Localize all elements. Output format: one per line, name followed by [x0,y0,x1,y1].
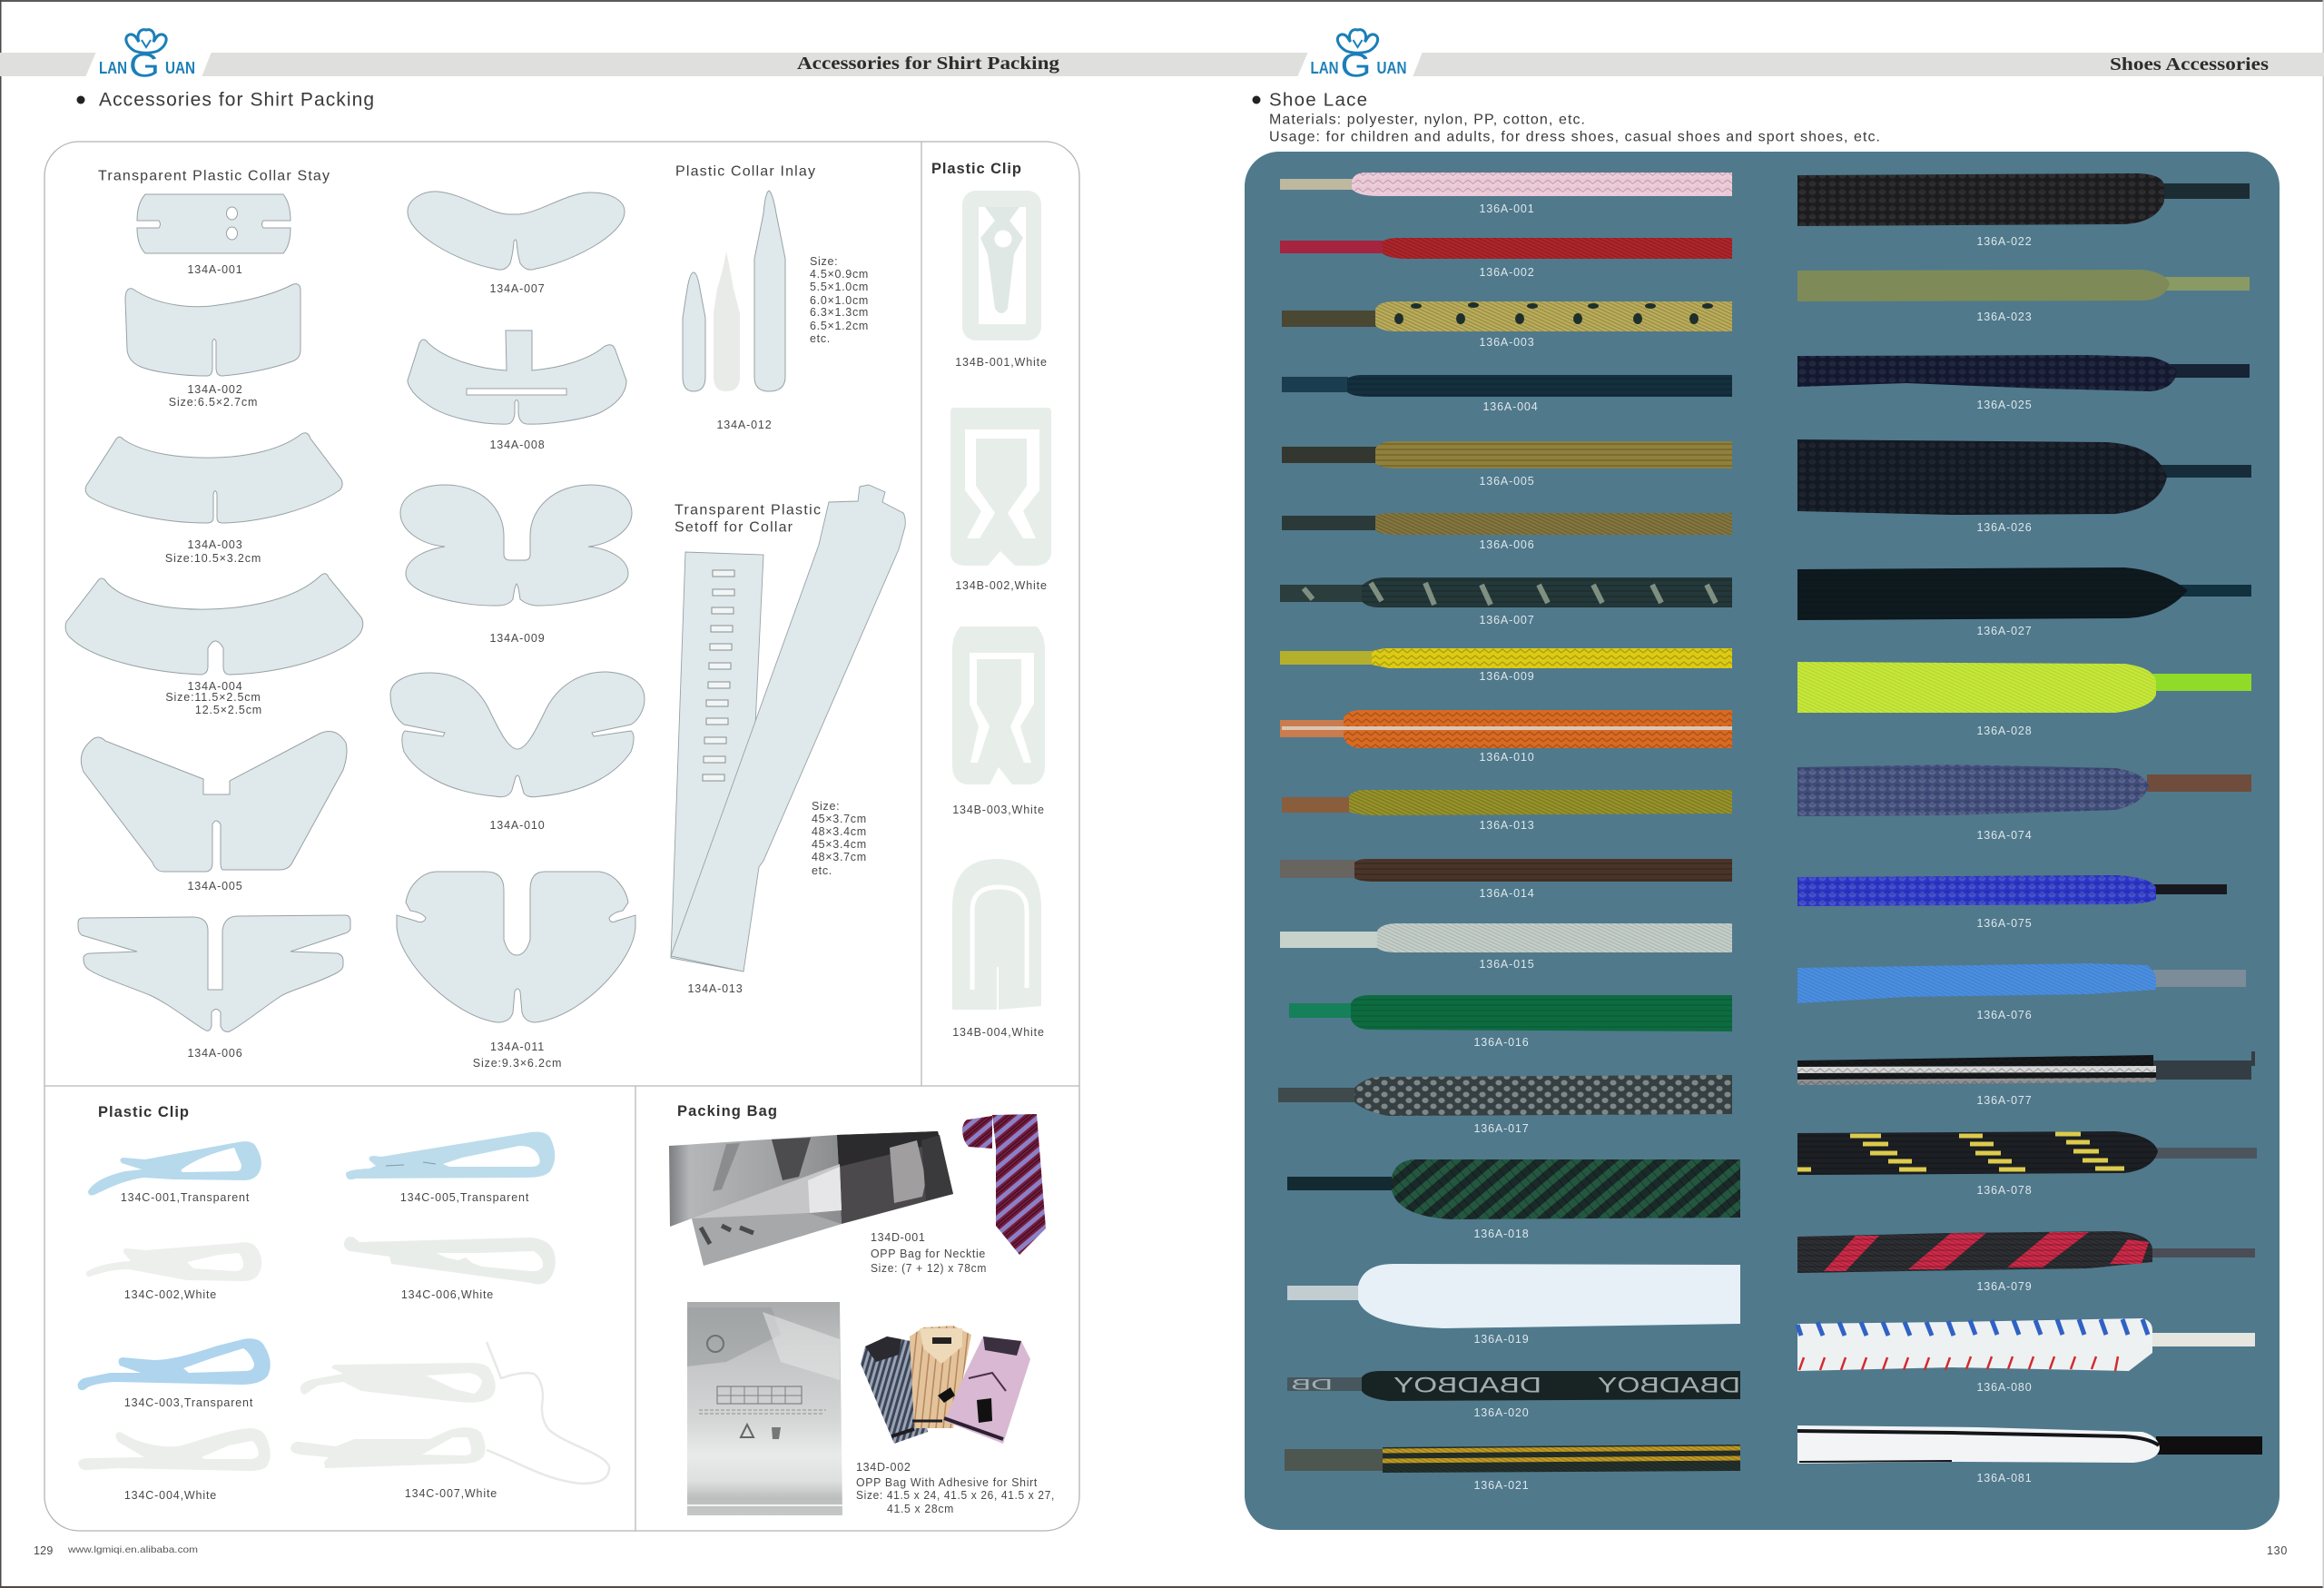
size list: inlay: 4.5×0.9cm [810,268,869,281]
collar stay 134A-007 [408,192,625,270]
label: 136A-006 [1479,538,1535,551]
label: 134B-002,White [955,579,1048,592]
clip 134C-005 [346,1132,555,1179]
label: 136A-027 [1976,625,2033,637]
lace 136A-004 [1282,375,1732,397]
size list: setoff [812,800,867,877]
label: 134C-002,White [124,1288,217,1301]
label: 134C-006,White [401,1288,494,1301]
clip 134C-007 with string [290,1342,609,1484]
clip 134C-002 [86,1242,261,1281]
photo: shirt OPP bag [687,1302,842,1515]
label: 136A-016 [1473,1036,1530,1049]
section heading: shirt packing: Accessories for Shirt Packing [99,89,374,111]
label: 136A-023 [1976,311,2033,323]
lace 136A-007 [1280,577,1732,607]
label: 136A-003 [1479,336,1535,349]
lace 136A-028 [1797,662,2251,713]
page number 129: 129 [34,1544,54,1557]
label: 136A-022 [1976,235,2033,248]
label: 136A-074 [1976,829,2033,842]
label with size [165,680,262,716]
section heading: shoe lace: Usage: for children and adults, for dress shoes, casual shoes and sport shoes, etc. [1269,129,1880,145]
lace 136A-022 [1797,173,2250,226]
page number 130: 130 [2267,1544,2288,1557]
collar stay 134A-006 [78,915,350,1031]
label: 136A-004 [1482,400,1539,413]
header band [0,52,2324,77]
lace 136A-003 [1282,301,1732,331]
lace 136A-081 [1797,1425,2262,1464]
lace 136A-077 [1797,1051,2255,1085]
heading: setoff: Transparent Plastic [675,503,821,518]
text: 134D-001: Size: (7 + 12) x 78cm [871,1262,987,1275]
text: 134D-002: 41.5 x 28cm [887,1503,954,1515]
lace 136A-010 [1280,710,1732,748]
label with size: 134A-004 [187,680,243,693]
label with size: 134A-011 [490,1041,545,1053]
logo: right: LAN [1311,59,1338,77]
lace 136A-074 [1797,764,2251,816]
label: 134A-007 [489,282,546,295]
collar stay 134A-004 [65,574,363,675]
clip 134B-001 [962,191,1041,340]
label: 134A-013 [687,982,743,995]
label with size [169,383,258,409]
label: 134C-003,Transparent [124,1396,253,1409]
lace 136A-078 [1797,1131,2257,1175]
lace 136A-020: DB [1291,1376,1333,1393]
lace 136A-015 [1280,923,1732,952]
label: 134C-005,Transparent [400,1191,529,1204]
lace 136A-079 [1797,1231,2255,1273]
size list: setoff: 48×3.4cm [812,825,867,838]
label: 136A-028 [1976,725,2033,737]
text: 134D-002: Size: 41.5 x 24, 41.5 x 26, 41.5 x 27, [856,1489,1055,1502]
collar inlay 134A-012 [683,191,785,391]
label: 136A-005 [1479,475,1535,488]
lace 136A-019 [1287,1264,1740,1328]
label with size: Size:9.3×6.2cm [473,1057,562,1070]
photo: folded shirts [861,1326,1030,1444]
logo: left: UAN [165,59,195,77]
lace 136A-005 [1282,441,1732,469]
size list: setoff: 45×3.7cm [812,813,867,825]
label: 136A-020 [1473,1406,1530,1419]
text: 134D-002: OPP Bag With Adhesive for Shirt [856,1476,1038,1489]
lace 136A-001 [1280,173,1732,196]
clip 134B-003 [952,626,1045,784]
lace 136A-076 [1797,963,2246,1003]
label: 134B-004,White [952,1026,1045,1039]
collar stay 134A-003 [85,433,342,523]
heading: setoff [675,503,821,536]
section heading: shoe lace [1253,89,1880,145]
lace 136A-075 [1797,875,2227,906]
label with size: Size:6.5×2.7cm [169,396,258,409]
clip 134B-004 [952,859,1041,1010]
label: 134C-004,White [124,1489,217,1502]
label: 134A-010 [489,819,546,832]
label with size: 134A-002 [187,383,243,396]
label: 136A-009 [1479,670,1535,683]
collar stay 134A-005 [81,732,347,872]
collar stay 134A-001 [137,194,290,253]
lace 136A-006 [1282,513,1732,535]
label: 136A-079 [1976,1280,2033,1293]
clip 134B-002 [950,408,1051,566]
label: 136A-076 [1976,1009,2033,1021]
size list: inlay: Size: [810,255,838,268]
panel: shirt packing accessories [44,142,1079,1531]
logo: right [1311,30,1407,84]
lace 136A-016 [1289,995,1732,1031]
label: 136A-025 [1976,399,2033,411]
lace 136A-027 [1797,567,2251,620]
photo: necktie OPP bag [669,1131,953,1266]
section heading: shoe lace: Shoe Lace [1269,89,1367,111]
label with size: Size:10.5×3.2cm [165,552,261,565]
label: 134A-012 [716,419,773,431]
heading: plastic clip B: Plastic Clip [931,161,1021,177]
label: 136A-021 [1473,1479,1530,1492]
collar stay 134A-010 [390,672,645,797]
header title: left page: Accessories for Shirt Packing [797,54,1059,74]
label: 136A-077 [1976,1094,2033,1107]
lace 136A-002 [1280,238,1732,259]
lace 136A-013 [1282,790,1732,815]
label: 134B-003,White [952,804,1045,816]
label: 136A-002 [1479,266,1535,279]
clip 134C-006 [344,1237,556,1285]
label: 134A-006 [187,1047,243,1060]
label: 136A-026 [1976,521,2033,534]
size list: inlay: 6.5×1.2cm [810,320,869,332]
label with size [165,538,261,565]
lace 136A-014 [1280,859,1732,882]
collar stay 134A-009 [400,485,632,606]
label: 134A-008 [489,439,546,451]
lace 136A-020: DBADBOY [1598,1373,1740,1398]
text: 134D-002: 134D-002 [856,1461,911,1474]
lace 136A-080 [1797,1318,2255,1371]
collar stay 134A-011 [397,872,635,1022]
label with size: Size:11.5×2.5cm [165,691,261,704]
label: 136A-017 [1473,1122,1530,1135]
collar stay 134A-008 [408,330,626,424]
label: 136A-075 [1976,917,2033,930]
label: 136A-080 [1976,1381,2033,1394]
label: 136A-081 [1976,1472,2033,1484]
lace 136A-020 [1287,1371,1740,1401]
lace 136A-020: DBADBOY [1393,1373,1541,1398]
heading: collar inlay: Plastic Collar Inlay [675,163,815,180]
size list: setoff: Size: [812,800,840,813]
label with size [473,1041,562,1070]
panel: shoe laces [1245,152,2280,1530]
size list: inlay: 6.0×1.0cm [810,294,869,307]
label: 134A-005 [187,880,243,893]
lace 136A-023 [1797,270,2250,301]
lace 136A-026 [1797,439,2251,515]
size list: inlay: etc. [810,332,831,345]
lace 136A-009 [1280,648,1732,668]
collar stay 134A-002 [125,284,300,376]
logo: left [99,30,195,84]
label: 136A-019 [1473,1333,1530,1346]
label: 136A-013 [1479,819,1535,832]
lace 136A-025 [1797,355,2250,391]
logo: left: LAN [99,59,127,77]
size list: setoff: 48×3.7cm [812,851,867,863]
label with size: 134A-003 [187,538,243,551]
text: 134D-001 [871,1231,987,1275]
label: 136A-015 [1479,958,1535,971]
website: www.lgmiqi.en.alibaba.com [67,1544,198,1555]
header title: right page: Shoes Accessories [2110,54,2269,74]
logo: right: UAN [1376,59,1407,77]
section heading: shoe lace: Materials: polyester, nylon, PP, cotton, etc. [1269,113,1585,127]
heading: collar stay: Transparent Plastic Collar Stay [98,169,330,183]
label: 136A-078 [1976,1184,2033,1197]
lace 136A-021 [1285,1445,1740,1473]
size list: inlay [810,255,869,345]
lace 136A-018 [1287,1159,1740,1219]
label: 136A-014 [1479,887,1535,900]
size list: setoff: etc. [812,864,832,877]
size list: inlay: 6.3×1.3cm [810,306,869,319]
setoff strips 134A-013 [671,485,905,972]
label with size: 12.5×2.5cm [195,704,262,716]
label: 134B-001,White [955,356,1048,369]
clip 134C-001 [88,1141,261,1196]
text: 134D-001: OPP Bag for Necktie [871,1248,986,1260]
label: 134A-009 [489,632,546,645]
heading: plastic clip C: Plastic Clip [98,1104,189,1120]
label: 136A-018 [1473,1228,1530,1240]
photo: necktie [962,1114,1046,1255]
heading: packing bag: Packing Bag [677,1103,777,1119]
clip 134C-004 [78,1428,271,1471]
logo: left: G [129,47,160,84]
label: 134A-001 [187,263,243,276]
label: 136A-007 [1479,614,1535,626]
text: 134D-002 [856,1461,1055,1515]
size list: setoff: 45×3.4cm [812,838,867,851]
clip 134C-003 [78,1338,271,1390]
heading: setoff: Setoff for Collar [675,519,793,536]
label: 136A-001 [1479,202,1535,215]
logo: right: G [1340,47,1371,84]
label: 134C-001,Transparent [121,1191,250,1204]
label: 134C-007,White [405,1487,497,1500]
text: 134D-001: 134D-001 [871,1231,926,1244]
size list: inlay: 5.5×1.0cm [810,281,869,293]
lace 136A-017 [1278,1075,1732,1116]
label: 136A-010 [1479,751,1535,764]
